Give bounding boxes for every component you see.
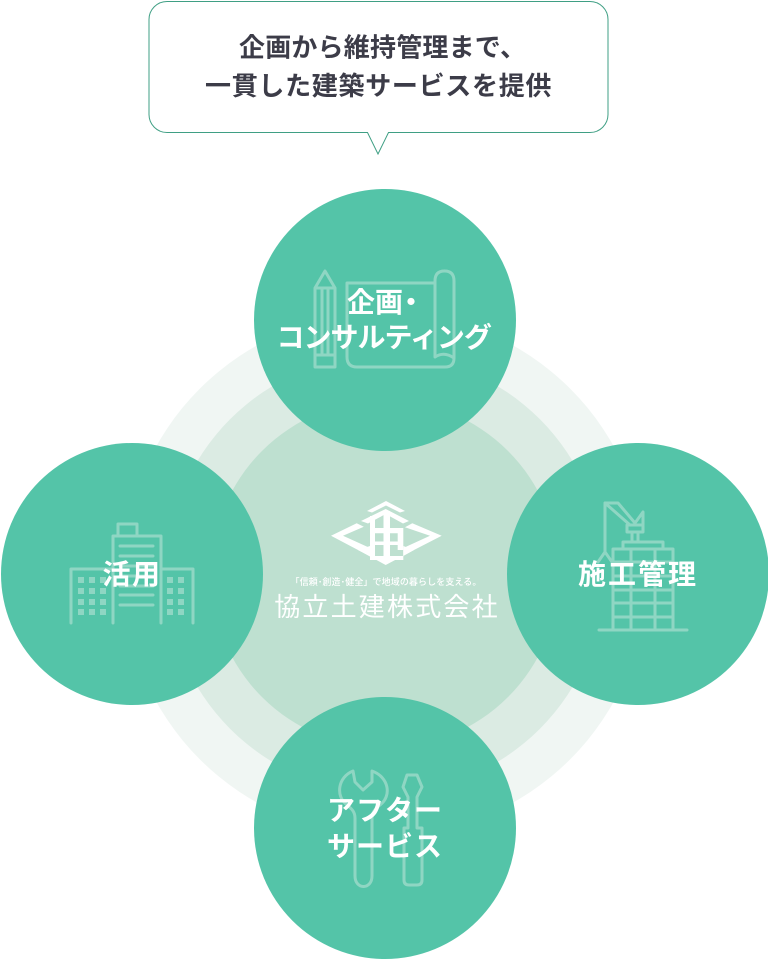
circle: after service [254, 697, 516, 959]
label: 活用 [102, 559, 162, 590]
company logo [274, 501, 500, 622]
logo company name: 協立土建株式会社 [274, 592, 500, 622]
speech bubble [149, 2, 608, 154]
logo tagline: 「信頼･創造･健全」で地域の暮らしを支える。 [291, 576, 481, 587]
logo mark [331, 501, 442, 565]
label: アフター [327, 795, 443, 826]
icon: buildings [71, 524, 193, 623]
icon: building with crane [598, 503, 687, 630]
circle: utilization [1, 443, 263, 705]
bubble heading [205, 32, 552, 101]
circle: construction management [507, 443, 768, 705]
label: 企画 [347, 287, 403, 318]
circle: planning and consulting [254, 189, 516, 451]
icon: pencil and blueprint [315, 271, 454, 367]
icon: wrench and screwdriver [340, 771, 422, 886]
bubble heading: 一貫した建築サービスを提供 [205, 71, 552, 101]
bubble heading: 企画から維持管理まで、 [239, 32, 526, 62]
label: コンサルティング [276, 321, 492, 353]
label: 施工管理 [578, 559, 698, 590]
label: サービス [327, 831, 443, 862]
concentric background rings [123, 312, 647, 836]
label: ・ [397, 287, 425, 318]
